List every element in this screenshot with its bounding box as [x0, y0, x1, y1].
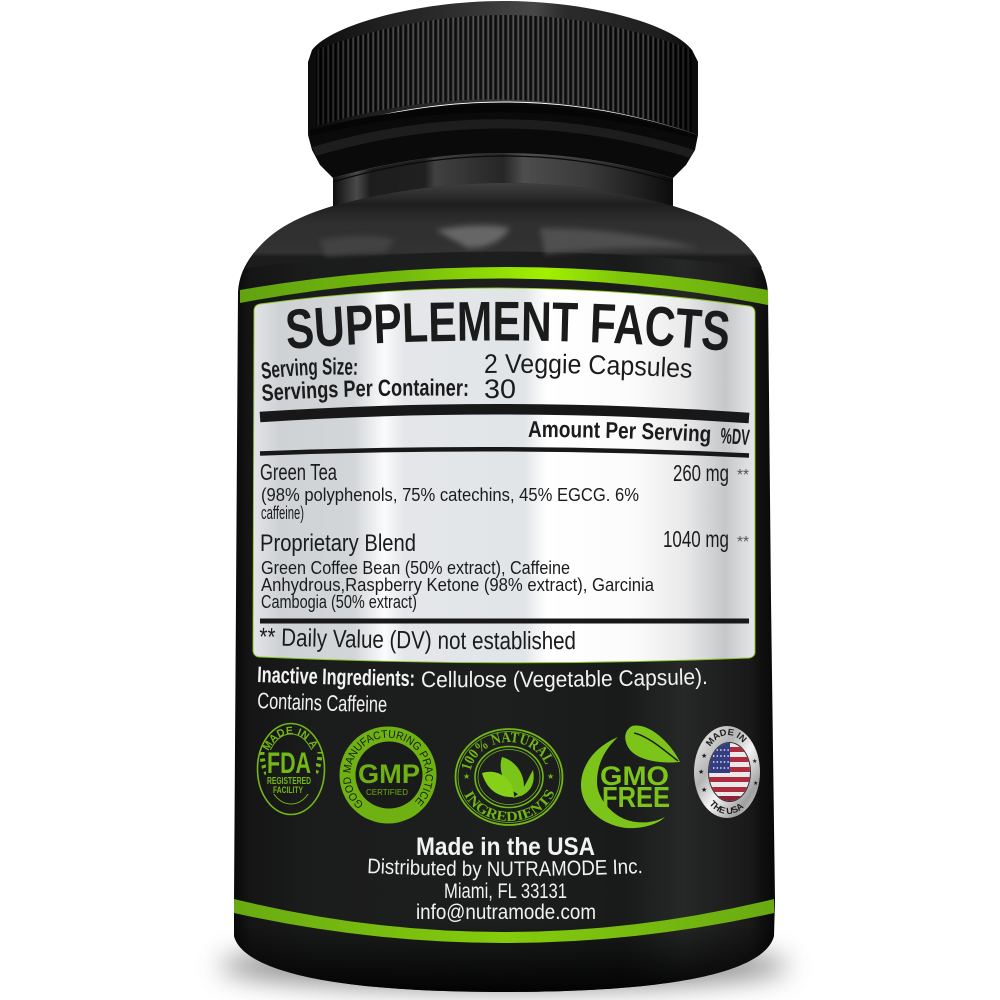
- shoulder highlights: [320, 225, 700, 256]
- blend amount: 1040 mg: [663, 526, 729, 552]
- badge: 100% natural ingredients: [454, 728, 564, 826]
- proprietary blend: Proprietary Blend: [260, 530, 416, 557]
- badge: made in the USA: ★: [701, 786, 707, 794]
- badge: made in the USA: MADE IN: [706, 728, 747, 746]
- daily value note: ** Daily Value (DV) not established: [260, 628, 575, 654]
- green tea detail: (98% polyphenols, 75% catechins, 45% EGCG. 6%: [261, 485, 639, 505]
- supplement facts label: [252, 288, 756, 664]
- badge: GMO free: FREE: [602, 782, 670, 814]
- lower rule: [260, 618, 749, 624]
- badge: 100% natural ingredients: ★: [463, 772, 470, 781]
- bottle shadow: [219, 942, 789, 990]
- servings value: 30: [484, 374, 516, 404]
- green bottom stripe: [234, 899, 774, 943]
- leaves: [482, 757, 534, 798]
- green tea: Green Tea: [260, 459, 338, 485]
- leaf: [625, 726, 680, 762]
- distributor: Distributed by NUTRAMODE Inc.: [368, 858, 642, 880]
- flag: [708, 743, 751, 801]
- badge: FDA registered: FACILITY: [273, 785, 303, 795]
- servings per container: Servings Per Container:: [262, 378, 468, 403]
- percent dv: %DV: [721, 428, 750, 445]
- title: SUPPLEMENT FACTS: [287, 302, 728, 350]
- badge: made in the USA: [694, 726, 760, 818]
- inactive ingredients value: Cellulose (Vegetable Capsule).: [422, 668, 706, 692]
- badge: FDA registered: [256, 722, 326, 816]
- serving size: Serving Size:: [262, 358, 357, 380]
- badge: made in the USA: ★: [701, 752, 707, 760]
- city: Miami, FL 33131: [444, 880, 567, 903]
- contains caffeine: Contains Caffeine: [258, 692, 386, 712]
- green tea detail line two: caffeine): [261, 503, 304, 523]
- badge: GMP certified: GOOD MANUFACTURING PRACTICE: [342, 730, 433, 808]
- blend line three: Cambogia (50% extract): [261, 592, 417, 612]
- badge: GMO free: [581, 726, 680, 828]
- badge: FDA registered: FDA: [267, 747, 311, 780]
- green top stripe: [240, 267, 768, 305]
- cap ridges: [316, 15, 692, 132]
- bottle neck: [333, 135, 673, 210]
- inactive ingredients heading: Inactive Ingredients:: [258, 666, 414, 690]
- badge: 100% natural ingredients: 100% NATURAL: [462, 732, 552, 770]
- amount per serving: Amount Per Serving: [528, 421, 710, 446]
- badge: 100% natural ingredients: INGREDIENTS: [464, 790, 554, 822]
- green tea amount: 260 mg: [673, 460, 729, 486]
- email: info@nutramode.com: [416, 901, 596, 924]
- badge: GMP certified: GMP: [358, 759, 420, 789]
- badge: FDA registered: REGISTERED: [267, 776, 311, 787]
- green tea dv: **: [737, 467, 749, 484]
- thin rule: [260, 449, 749, 456]
- blend dv: **: [737, 534, 749, 551]
- badge: 100% natural ingredients: ★: [547, 772, 554, 781]
- badge: made in the USA: ★: [698, 768, 704, 776]
- thick rule: [260, 409, 749, 418]
- badge: made in the USA: ★: [752, 758, 757, 765]
- bottle cap: [308, 1, 698, 178]
- badge: FDA registered: MADE IN A: [262, 726, 317, 750]
- badge: made in the USA: THE USA: [710, 800, 744, 814]
- badge: GMO free: GMO: [600, 761, 669, 791]
- blend line one: Green Coffee Bean (50% extract), Caffeine: [261, 558, 570, 578]
- shoulder: [246, 183, 762, 268]
- blend line two: Anhydrous,Raspberry Ketone (98% extract), Garcinia: [261, 575, 655, 595]
- badge: made in the USA: ★: [753, 780, 758, 787]
- serving size value: 2 Veggie Capsules: [485, 354, 692, 380]
- bottle body: [234, 183, 775, 992]
- badge: GMP certified: CERTIFIED: [366, 788, 408, 797]
- made in the USA heading: Made in the USA: [416, 833, 595, 861]
